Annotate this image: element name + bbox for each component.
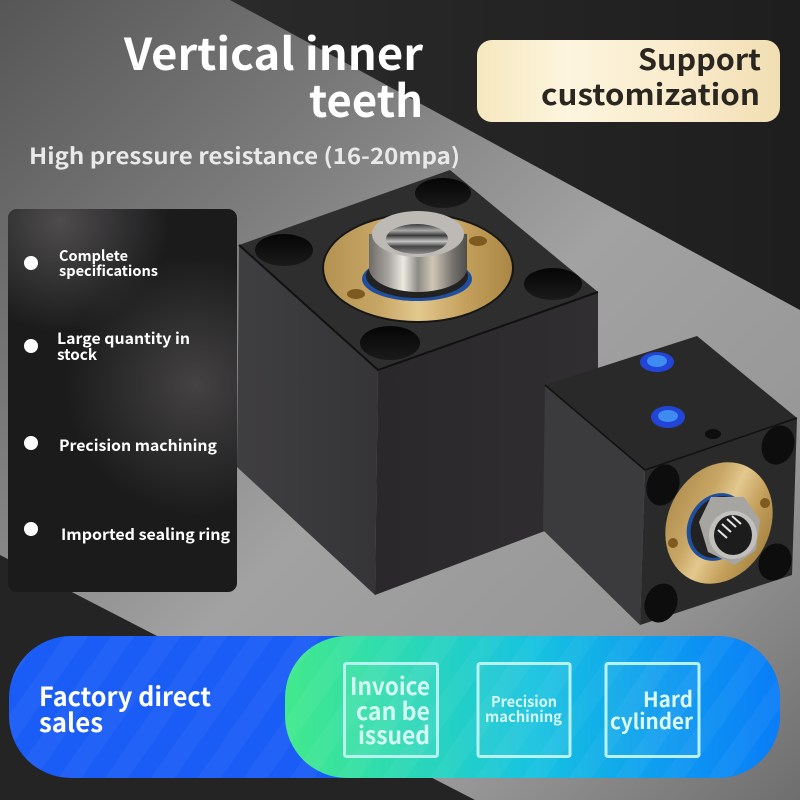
icon: hex nut [699, 497, 760, 565]
feature: large quantity in stock [24, 327, 190, 365]
feature: precision machining: Precision machining [59, 434, 217, 456]
badge: support customization [477, 37, 780, 122]
title [123, 19, 424, 130]
icon: brass flange [322, 213, 514, 323]
feature: imported sealing ring: Imported sealing ring [61, 523, 230, 545]
feature: complete specifications [24, 245, 158, 281]
icon: brass flange front [645, 444, 793, 602]
icon: blue ports [640, 352, 721, 439]
card: invoice can be issued: can be [356, 692, 430, 727]
feature: large quantity in stock: Large quantity in [57, 327, 190, 349]
card: precision machining [478, 664, 570, 756]
card: invoice can be issued: Invoice [350, 667, 430, 702]
feature: complete specifications: specifications [59, 260, 158, 281]
large cylinder block [237, 170, 598, 595]
card: precision machining: machining [485, 706, 562, 727]
icon: front holes [639, 421, 800, 628]
card: hard cylinder: cylinder [610, 706, 694, 736]
icon: mounting holes [255, 178, 582, 360]
card: invoice can be issued [344, 664, 438, 756]
panel: features [8, 209, 237, 592]
factory direct sales label: sales [39, 703, 103, 740]
factory direct sales label: Factory direct [39, 677, 211, 714]
subtitle: High pressure resistance (16-20mpa) [29, 139, 460, 171]
feature: complete specifications: Complete [59, 245, 128, 266]
badge: support customization: Support [638, 37, 761, 79]
banner accent pill [285, 636, 780, 778]
small cylinder block [543, 336, 800, 628]
card: hard cylinder: Hard [643, 684, 693, 714]
factory direct sales label [39, 677, 211, 740]
icon: piston rod [369, 211, 467, 292]
card: precision machining: Precision [491, 691, 557, 712]
feature: large quantity in stock: stock [57, 343, 98, 365]
title: Vertical inner [123, 19, 424, 83]
card: hard cylinder [606, 664, 699, 756]
badge: support customization: customization [541, 72, 760, 114]
title: teeth [309, 66, 423, 130]
banner [9, 636, 780, 778]
card: invoice can be issued: issued [358, 716, 430, 751]
